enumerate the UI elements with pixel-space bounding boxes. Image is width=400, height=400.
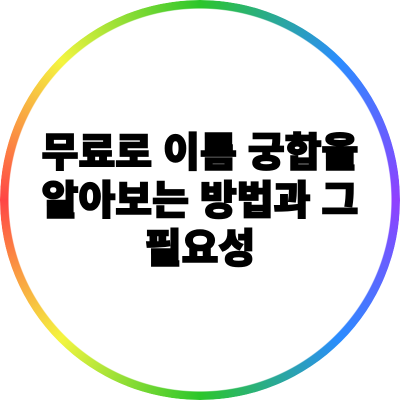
title xyxy=(42,131,358,271)
title: 필요성 xyxy=(145,227,255,271)
title: 무료로 이름 궁합을 xyxy=(42,131,358,175)
title: 알아보는 방법과 그 xyxy=(42,179,358,223)
